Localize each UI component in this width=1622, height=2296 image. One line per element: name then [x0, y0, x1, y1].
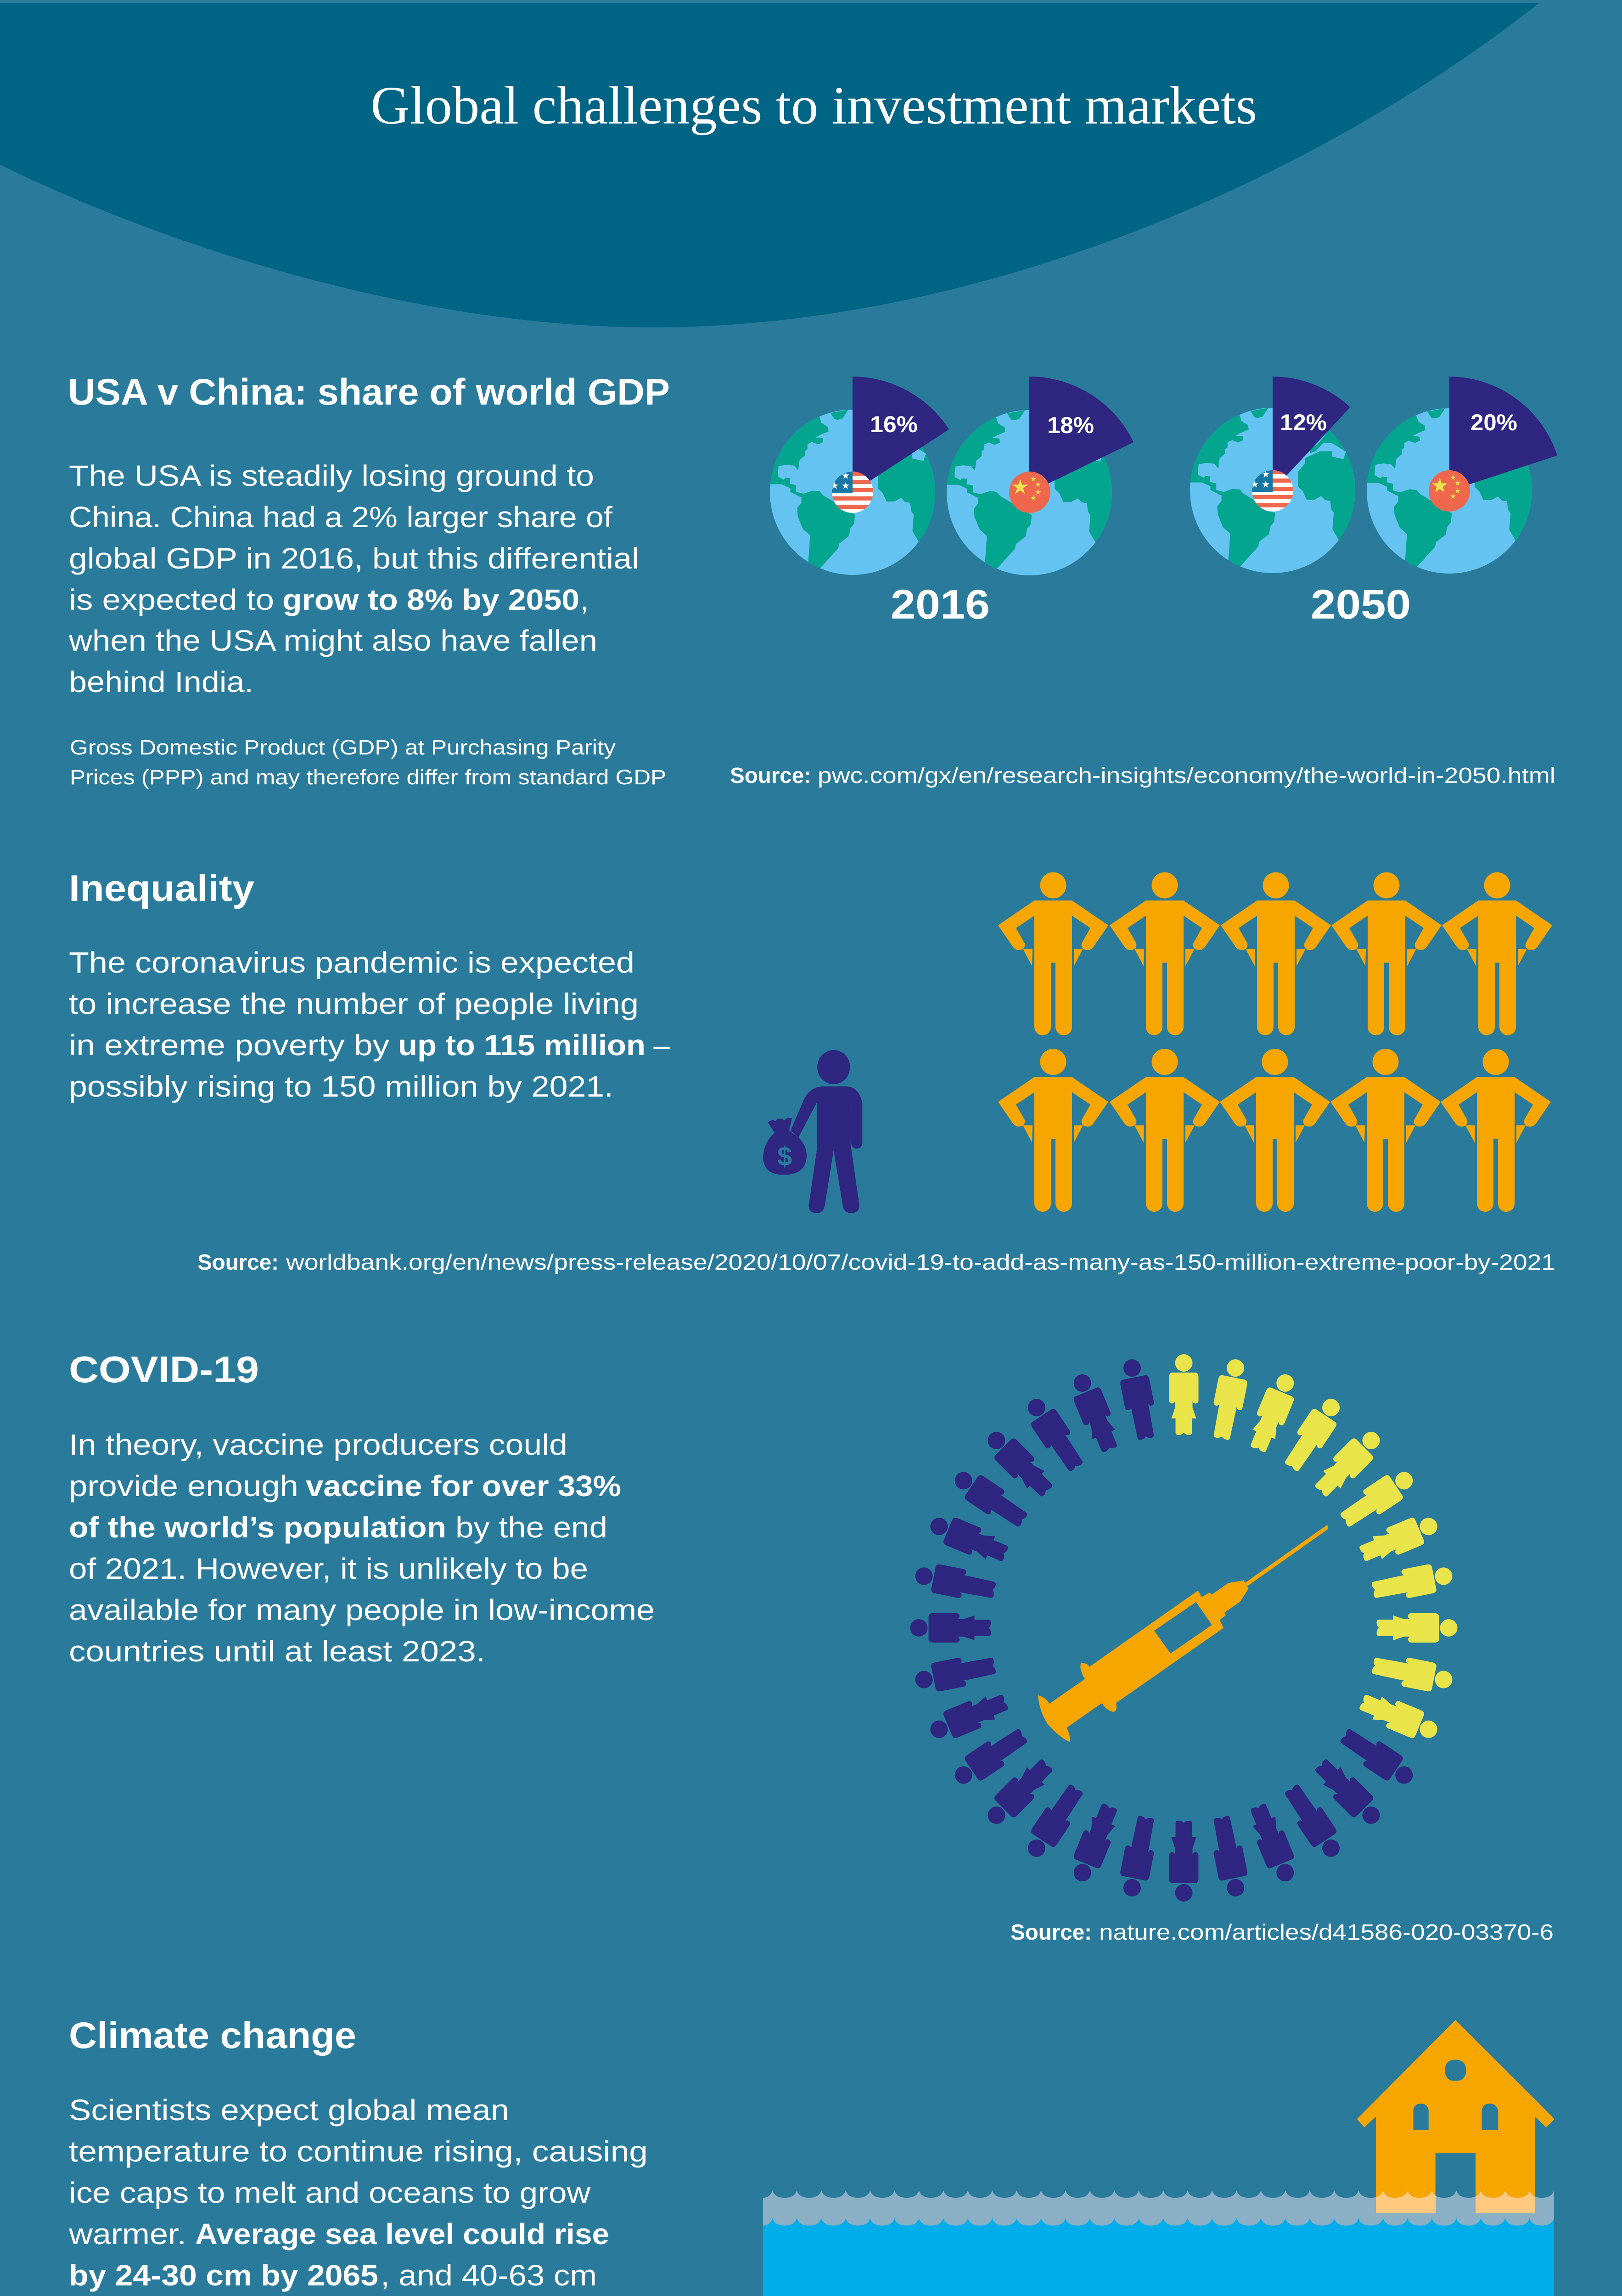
heading: Climate change: Climate change — [69, 2015, 356, 2056]
globe: USA 2016 — [761, 377, 949, 575]
source: COVID-19: Source: — [1010, 1920, 1092, 1945]
text block: Inequality: possibly rising to 150 million by 2021. — [69, 1070, 613, 1103]
text block: USA v China: behind India. — [69, 665, 253, 698]
text block: COVID-19: In theory, vaccine producers could — [69, 1428, 567, 1461]
icon: syringe — [1038, 1525, 1328, 1742]
source: Inequality: worldbank.org/en/news/press-release/2020/10/07/covid-19-to-add-as-many-as-150-million-extreme-poor-by-2021 — [286, 1250, 1555, 1275]
chart: ring of people vaccinated — [910, 1354, 1457, 1902]
text block: COVID-19: of 2021. However, it is unlikely to be — [69, 1552, 588, 1585]
icon group: wealthy people bottom row — [998, 1049, 1551, 1212]
source: COVID-19: nature.com/articles/d41586-020-03370-6 — [1099, 1920, 1554, 1945]
text block: COVID-19: by the end — [455, 1511, 607, 1544]
text block: Climate change: ice caps to melt and oceans to grow — [69, 2176, 591, 2209]
globe: China 2016 — [938, 377, 1134, 575]
text block: Climate change — [68, 2093, 648, 2296]
vaccinated people — [1169, 1354, 1457, 1746]
text block: Inequality: The coronavirus pandemic is expected — [69, 946, 634, 979]
sea level: flood band — [763, 2190, 1554, 2276]
globe: USA 2016: 16% — [870, 411, 918, 437]
globe: USA 2050 — [1181, 377, 1369, 573]
label: 2050: 2050 — [1311, 582, 1411, 628]
heading: Inequality: Inequality — [69, 868, 254, 909]
heading: USA v China: USA v China: share of world GDP — [68, 371, 670, 413]
text block: USA v China: when the USA might also have fallen — [68, 624, 597, 657]
sea — [763, 2218, 1554, 2296]
text block: USA v China: , — [580, 583, 589, 616]
text block: Climate change: Scientists expect global mean — [69, 2093, 509, 2127]
icon: house — [1357, 2020, 1555, 2213]
unvaccinated people — [910, 1356, 1420, 1902]
text block: Climate change: temperature to continue rising, causing — [69, 2135, 648, 2168]
text block: COVID-19 — [69, 1428, 655, 1668]
note: GDP definition: Prices (PPP) and may therefore differ from standard GDP — [70, 765, 666, 789]
label: 2016: 2016 — [891, 582, 990, 628]
text block: Climate change: , and 40-63 cm — [381, 2259, 597, 2292]
text block: COVID-19: vaccine for over 33% — [306, 1469, 621, 1503]
icon group: wealthy people top row — [998, 872, 1552, 1035]
text block: Inequality: – — [653, 1029, 670, 1062]
title: Global challenges to investment markets — [370, 75, 1257, 135]
text block: USA v China: The USA is steadily losing ground to — [69, 459, 594, 492]
text block: Climate change: by 24-30 cm by 2065 — [69, 2259, 378, 2292]
icon: dollar sign: $ — [777, 1142, 792, 1171]
globe: China 2050 — [1358, 377, 1557, 574]
heading: COVID-19: COVID-19 — [69, 1349, 259, 1390]
text block: USA v China: is expected to — [69, 583, 274, 616]
text block: USA v China: grow to 8% by 2050 — [282, 583, 579, 616]
text block: Climate change: warmer. — [68, 2217, 186, 2251]
text block: COVID-19: available for many people in low-income — [69, 1593, 655, 1626]
text block: Inequality: up to 115 million — [398, 1029, 645, 1062]
note: GDP definition — [70, 736, 666, 789]
house submerged part — [1376, 2190, 1535, 2213]
text block: Inequality — [69, 946, 670, 1103]
text block: USA v China: global GDP in 2016, but this differential — [69, 542, 639, 575]
source: USA v China: Source: — [730, 764, 811, 788]
note: GDP definition: Gross Domestic Product (GDP) at Purchasing Parity — [70, 736, 616, 759]
globe: USA 2050: 12% — [1280, 410, 1327, 435]
source: USA v China: pwc.com/gx/en/research-insights/economy/the-world-in-2050.html — [818, 764, 1555, 788]
text block: COVID-19: of the world’s population — [69, 1511, 446, 1544]
text block: Inequality: in extreme poverty by — [69, 1029, 389, 1062]
header shape — [0, 3, 1539, 327]
globe: China 2016: 18% — [1047, 412, 1094, 438]
text block: USA v China: China. China had a 2% larger share of — [69, 501, 612, 534]
text block: COVID-19: countries until at least 2023. — [69, 1635, 485, 1668]
source: Inequality: Source: — [197, 1250, 279, 1275]
text block: USA v China — [68, 459, 639, 698]
globe: China 2050: 20% — [1470, 410, 1517, 435]
icon: poor man with money bag — [763, 1050, 862, 1213]
text block: Inequality: to increase the number of people living — [69, 987, 639, 1020]
text block: Climate change: Average sea level could rise — [195, 2217, 609, 2251]
text block: COVID-19: provide enough — [69, 1469, 298, 1503]
